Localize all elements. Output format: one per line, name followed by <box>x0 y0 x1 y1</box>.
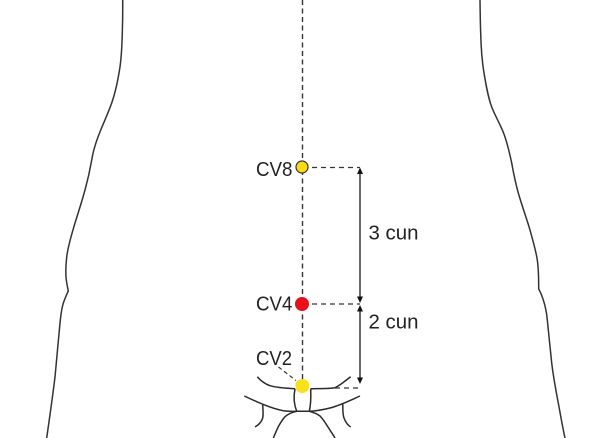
point: CV4 <box>295 297 309 311</box>
body outline: right side <box>480 0 565 438</box>
horizontal dashed guide lines <box>312 168 362 388</box>
label: CV4: CV4 <box>256 292 292 316</box>
pelvis lines <box>244 377 360 438</box>
label: CV8: CV8 <box>256 158 292 181</box>
leader line for CV2 <box>278 367 296 380</box>
measure arrow: 2 cun <box>357 305 363 384</box>
label: CV2: CV2 <box>256 347 292 370</box>
point: CV2 <box>295 379 309 393</box>
point: CV8 <box>296 161 308 173</box>
label: 2 cun: 2 cun <box>368 310 418 334</box>
measure arrow: 3 cun <box>357 168 363 303</box>
body outline: left side <box>47 0 123 438</box>
label: 3 cun: 3 cun <box>368 222 418 244</box>
midline dashed line <box>302 0 304 379</box>
